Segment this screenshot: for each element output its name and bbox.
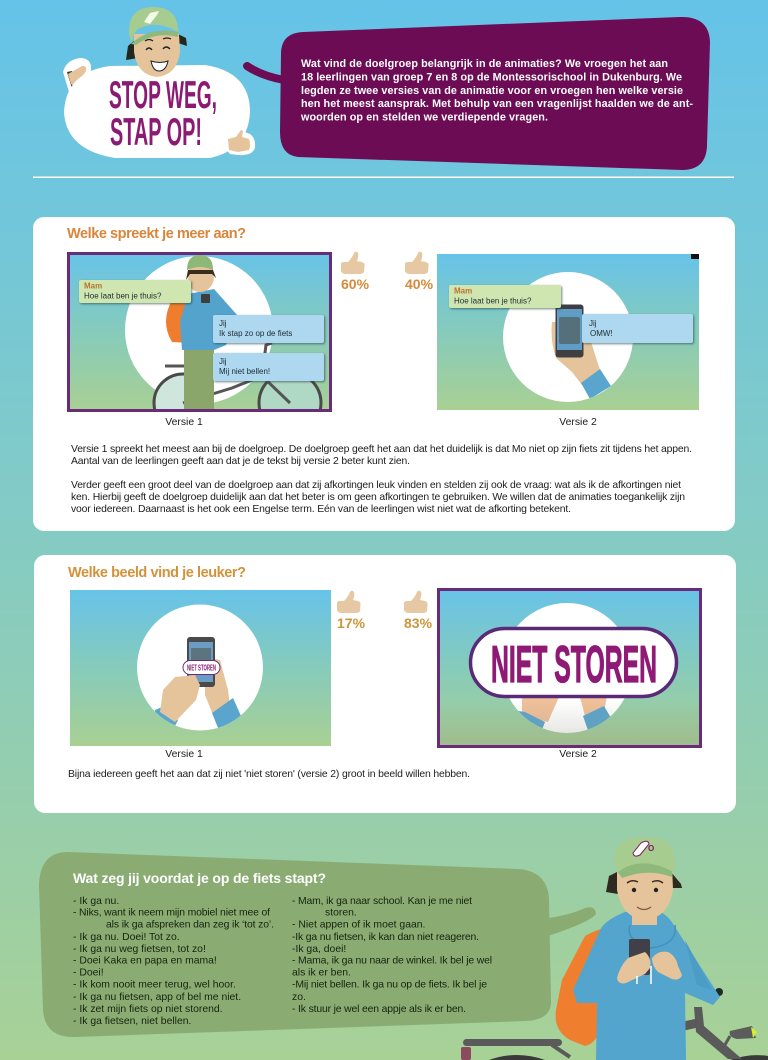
chat bubble: jij: Mij niet bellen! <box>219 367 270 376</box>
score: 60% <box>341 252 370 292</box>
caption: Versie 1 <box>165 417 203 428</box>
chat bubble: mam: Mam <box>84 282 102 290</box>
heading: Welke beeld vind je leuker? <box>68 565 246 581</box>
list right: als ik er ben. <box>292 968 351 978</box>
speech bubble: wat zeg jij <box>39 852 596 1037</box>
intro text <box>300 58 693 124</box>
intro text: woorden op en stelden we verdiepende vragen. <box>300 112 548 124</box>
picture: versie 2 <box>437 254 699 410</box>
score: 17%: 17% <box>337 615 366 631</box>
score: 83%: 83% <box>404 615 433 631</box>
body text: Versie 1 spreekt het meest aan bij de doelgroep. De doelgroep geeft het aan dat het duidelijk is dat Mo niet op zijn fiets zit tijdens het appen. <box>71 444 692 455</box>
chat bubble: mam: Hoe laat ben je thuis? <box>84 292 162 300</box>
badge: niet storen: NIET STOREN <box>187 664 216 672</box>
chat bubble: jij: Ik stap zo op de fiets <box>219 329 292 338</box>
list right: zo. <box>292 992 306 1003</box>
speech bubble: introduction <box>247 17 710 170</box>
chat bubble: jij: Jij <box>589 319 597 328</box>
panel: welke spreekt je meer aan <box>33 217 735 531</box>
phone and hands <box>617 939 682 984</box>
chat bubble: jij <box>582 314 693 343</box>
body text: Aantal van de leerlingen geeft aan dat je de tekst bij versie 2 beter kunt zien. <box>71 456 410 467</box>
body text: voor iedereen. Daarnaast is het ook een Engelse term. Eén van de leerlingen wist niet wat de afkorting betekent. <box>71 504 571 515</box>
list left: - Ik ga nu weg fietsen, tot zo! <box>73 944 206 955</box>
picture: versie 2 <box>437 588 702 748</box>
score: 17% <box>337 591 366 631</box>
list right: - Mam, ik ga naar school. Kan je me niet <box>292 896 472 907</box>
head <box>606 837 682 925</box>
body text: Verder geeft een groot deel van de doelgroep aan dat zij afkortingen leuk vinden en stelden zij ook de vraag: wat als ik de afkortingen niet <box>71 480 681 491</box>
score: 40%: 40% <box>405 276 434 292</box>
icon: hand with phone <box>63 58 91 98</box>
backpack <box>556 925 618 1046</box>
chat bubble: mam: Hoe laat ben je thuis? <box>454 296 532 306</box>
list left: als ik ga afspreken dan zeg ik ‘tot zo’. <box>106 920 274 930</box>
hoodie <box>573 912 720 1060</box>
intro text: hen het meest aansprak. Met behulp van een vragenlijst haalden we de ant- <box>301 98 693 110</box>
list right: - Mama, ik ga nu naar de winkel. Ik bel je wel <box>292 956 492 966</box>
panel: welke beeld vind je leuker <box>34 555 736 813</box>
score: 60%: 60% <box>341 276 370 292</box>
intro text: legden ze twee versies van de animatie voor en vroegen hen welke versie <box>301 85 683 97</box>
list right: - Ik stuur je wel een appje als ik er ben. <box>292 1004 466 1015</box>
body text: ken. Hierbij geeft de doelgroep duidelijk aan dat het beter is om geen afkortingen te gebruiken. We willen dat de animaties toegankelijk zijn <box>71 492 685 503</box>
logo: stop weg, stap op <box>63 7 255 158</box>
list left: - Ik ga nu fietsen, app of bel me niet. <box>73 992 241 1003</box>
score: 83% <box>404 591 433 631</box>
list left: - Ik zet mijn fiets op niet storend. <box>73 1004 223 1015</box>
body text <box>71 444 692 515</box>
caption: Versie 1 <box>165 749 203 760</box>
heading: Welke spreekt je meer aan? <box>67 226 246 242</box>
character: boy with bike <box>461 837 768 1060</box>
chat bubble: jij: Jij <box>219 357 227 366</box>
logo text <box>109 74 217 154</box>
chat bubble: mam <box>449 285 561 308</box>
list left: - Niks, want ik neem mijn mobiel niet mee of <box>73 908 270 918</box>
list right: -Ik ga, doei! <box>292 944 346 955</box>
caption: Versie 2 <box>559 749 597 760</box>
chat bubble: jij: Jij <box>219 319 227 328</box>
caption: Versie 2 <box>559 417 597 428</box>
chat bubble: jij <box>213 353 324 381</box>
intro text: 18 leerlingen van groep 7 en 8 op de Montessorischool in Dukenburg. We <box>301 72 682 84</box>
chat bubble: mam <box>79 280 191 303</box>
intro text: Wat vind de doelgroep belangrijk in de animaties? We vroegen het aan <box>301 58 668 70</box>
picture: versie 1 <box>70 590 331 746</box>
badge: niet storen <box>470 628 676 696</box>
list left: - Ik ga nu. <box>73 896 119 907</box>
chat bubble: mam: Mam <box>454 286 472 296</box>
character head <box>126 7 187 77</box>
head: O <box>648 844 654 853</box>
list left: - Ik ga nu. Doei! Tot zo. <box>73 932 180 943</box>
list left: - Ik kom nooit meer terug, wel hoor. <box>73 980 236 990</box>
bike <box>461 988 768 1060</box>
list right: -Mij niet bellen. Ik ga nu op de fiets. Ik bel je <box>292 980 487 990</box>
list left: - Doei Kaka en papa en mama! <box>73 956 217 966</box>
picture: versie 1 <box>67 252 332 412</box>
list right: -Ik ga nu fietsen, ik kan dan niet reageren. <box>292 932 479 943</box>
icon: thumb up <box>225 127 255 155</box>
chat bubble: jij <box>213 315 324 343</box>
list right: - Niet appen of ik moet gaan. <box>292 920 425 930</box>
list left: - Ik ga fietsen, niet bellen. <box>73 1016 191 1027</box>
list right: storen. <box>325 908 357 918</box>
chat bubble: jij: OMW! <box>590 329 613 338</box>
heading: Wat zeg jij voordat je op de fiets stapt? <box>73 870 326 886</box>
logo text: STAP OP! <box>110 111 202 154</box>
list right <box>292 896 492 1015</box>
list left <box>73 896 274 1027</box>
white cloud <box>64 65 250 158</box>
score: 40% <box>405 252 434 292</box>
conclusion text: Bijna iedereen geeft het aan dat zij niet 'niet storen' (versie 2) groot in beeld willen hebben. <box>68 769 470 780</box>
badge: niet storen <box>183 660 220 674</box>
logo: stop weg, stap op: STOP WEG, <box>109 74 217 117</box>
list left: - Doei! <box>73 968 104 978</box>
